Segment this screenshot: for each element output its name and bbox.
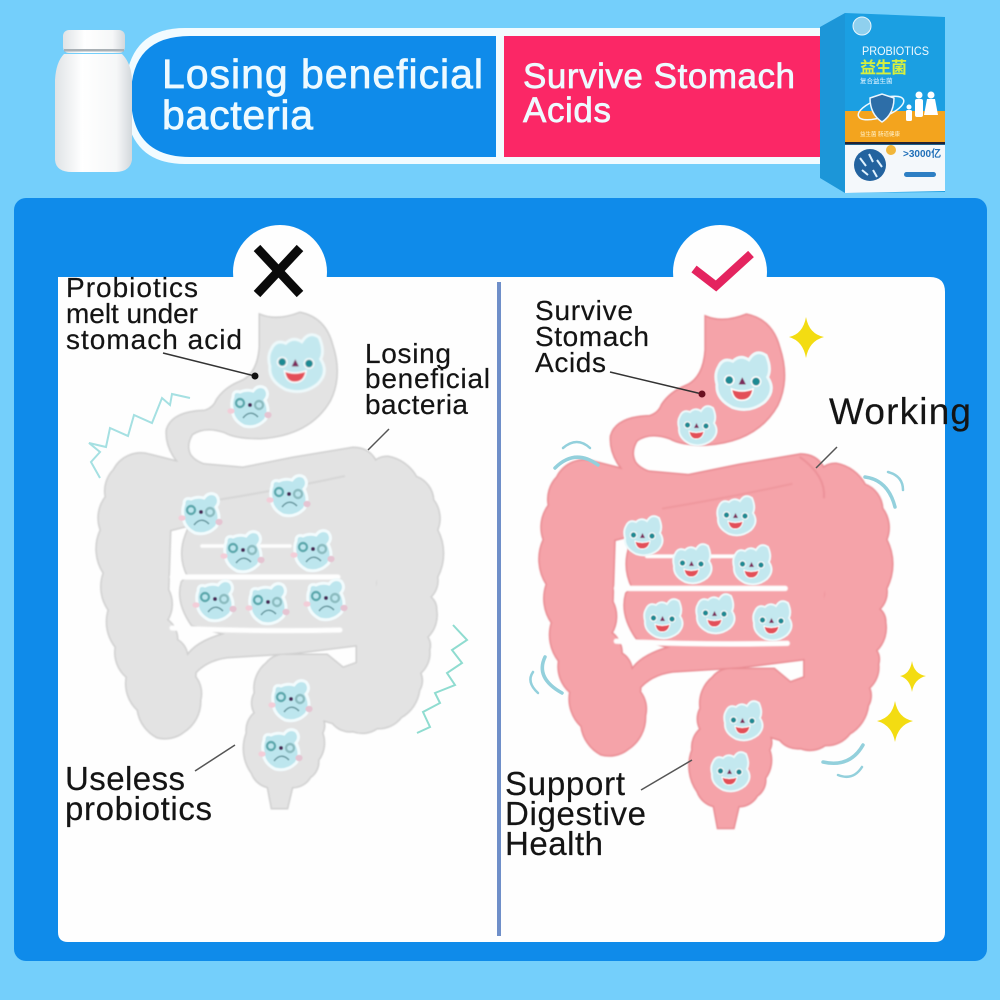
panel: blue comparison frame [14, 198, 987, 961]
label: survive stomach acids [535, 295, 649, 378]
leader: working [816, 447, 837, 468]
label: useless probiotics [65, 760, 212, 827]
label: useless probiotics: probiotics [65, 790, 212, 827]
blue header block: Losing beneficial [162, 51, 483, 97]
label: losing beneficial bacteria [365, 338, 490, 420]
pink digestive tract (effective) [540, 315, 892, 828]
leader: useless probiotics [195, 745, 235, 771]
icon: lower right zigzag [417, 625, 467, 733]
pink intestine and stomach shape [540, 315, 892, 828]
gray intestine and stomach shape [97, 313, 443, 808]
icon: white supplement bottle [55, 30, 132, 172]
label: losing beneficial bacteria: bacteria [365, 389, 468, 420]
blue header block: bacteria [162, 92, 313, 138]
box family figures [906, 92, 938, 121]
sad bacteria faces [178, 387, 348, 770]
box logo [853, 17, 871, 35]
label: losing beneficial bacteria: beneficial [365, 363, 490, 394]
leader: support digestive [641, 760, 692, 790]
leader: losing bacteria [368, 429, 389, 450]
box badge [904, 172, 936, 177]
icon: upper left zigzag [89, 394, 190, 478]
icon: motion arcs [530, 442, 903, 777]
happy face in gray stomach [269, 335, 324, 392]
label: probiotics melt: melt under [66, 298, 198, 329]
icon: probiotics product box [820, 13, 945, 193]
blue header block [131, 36, 496, 157]
label: probiotics melt: Probiotics [66, 272, 198, 303]
label: support digestive health: Support [505, 765, 625, 802]
label: support digestive health: Digestive [505, 795, 646, 832]
label: probiotics melt [66, 272, 242, 355]
label: useless probiotics: Useless [65, 760, 185, 797]
panel: white comparison card [58, 225, 945, 942]
label: survive stomach acids: Survive [535, 295, 633, 326]
happy bacteria faces [624, 353, 792, 791]
leader: survive acids [610, 372, 706, 398]
icon: pink check mark [694, 254, 751, 286]
icon: black cross [257, 248, 300, 294]
box subtitle: 复合益生菌 [860, 76, 893, 85]
pink header block [504, 36, 822, 157]
divider between panels [497, 282, 501, 936]
label: support digestive health [505, 765, 646, 862]
label: support digestive health: Health [505, 825, 603, 862]
banner white outline [125, 28, 825, 164]
label: probiotics melt: stomach acid [66, 324, 242, 355]
box chinese name: 益生菌 [860, 59, 907, 77]
label: working: Working [829, 391, 971, 432]
gray digestive tract (ineffective) [97, 313, 443, 808]
header comparison banner [125, 28, 825, 164]
label: losing beneficial bacteria: Losing [365, 338, 451, 369]
box title: PROBIOTICS [862, 44, 929, 58]
box orange band text: 益生菌 肠道健康 [860, 130, 901, 138]
box count text: >3000亿 [903, 147, 941, 160]
label: survive stomach acids: Stomach [535, 321, 649, 352]
label: survive stomach acids: Acids [535, 347, 606, 378]
icon: yellow sparkles [789, 317, 926, 742]
box bacteria circle [854, 145, 896, 181]
box shield emblem [855, 91, 907, 125]
pink header block: Survive Stomach [523, 57, 795, 96]
leader: stomach acid [163, 353, 258, 380]
pink header block: Acids [523, 91, 611, 130]
